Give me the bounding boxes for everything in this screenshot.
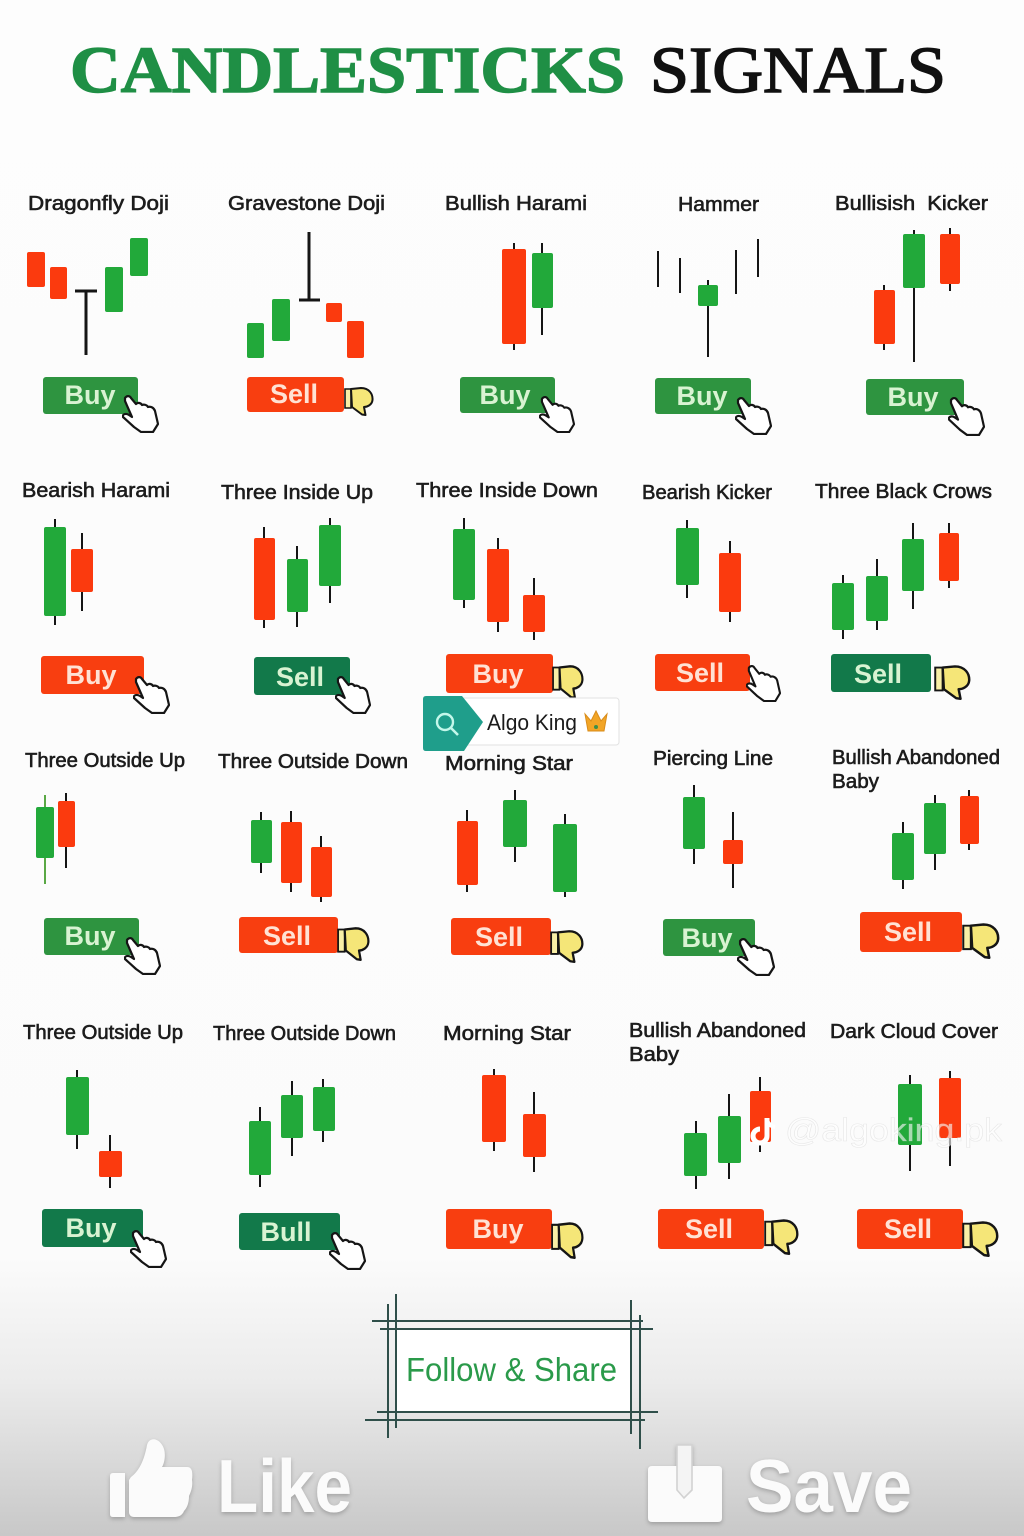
chart (453, 518, 545, 640)
chart (27, 238, 148, 355)
panel: Gravestone Doji (228, 193, 385, 415)
label: Bearish Kicker (642, 482, 772, 504)
button: Buy (42, 1209, 143, 1247)
button: Sell: Sell (884, 917, 932, 947)
icon: hand (131, 1231, 166, 1267)
button: Sell: Sell (475, 922, 523, 952)
watermark: @algoking.pk (785, 1112, 1003, 1148)
button: Buy (41, 656, 144, 694)
panel: Piercing Line (653, 748, 774, 975)
icon: thumbs down (345, 388, 373, 415)
chart (502, 243, 553, 350)
label (629, 1020, 806, 1066)
label: Hammer (678, 194, 759, 216)
chart (874, 228, 960, 362)
icon: hand (330, 1233, 365, 1269)
label: Piercing Line (653, 748, 773, 770)
icon: thumbs down (765, 1220, 797, 1254)
chart (254, 518, 341, 628)
panel: Dragonfly Doji (27, 193, 169, 432)
chart (676, 520, 741, 622)
label: Dragonfly Doji (28, 193, 169, 215)
label: Three Outside Up (25, 750, 185, 772)
panel: Bullish Harami (445, 193, 587, 432)
panel: Dark Cloud Cover (830, 1021, 998, 1256)
icon: thumbs down (963, 924, 998, 958)
chart (251, 811, 332, 902)
panel: Bearish Kicker (642, 482, 780, 701)
button: Sell: Sell (676, 658, 724, 688)
icon: thumbs down (338, 928, 368, 960)
button: Sell (831, 654, 931, 692)
icon: thumbs down (935, 666, 969, 699)
label: Morning Star (445, 753, 573, 775)
button: Buy (866, 379, 964, 415)
icon: hand (123, 396, 158, 432)
chart (892, 790, 979, 889)
panel: Three Outside Up (second) (23, 1022, 183, 1267)
icon: thumbs down (551, 931, 582, 962)
title: SIGNALS (650, 34, 946, 107)
button: Buy: Buy (64, 380, 116, 410)
chart (66, 1070, 122, 1188)
panel: Bullish Abandoned Baby (832, 747, 1000, 958)
label: Baby (629, 1044, 679, 1066)
icon: thumbs up (110, 1439, 192, 1517)
panel: Bullish Abandoned Baby (second) (629, 1020, 806, 1254)
label: Three Outside Down (218, 751, 408, 773)
label: Bullisish Kicker (835, 193, 988, 215)
panel: Three Inside Down (416, 480, 598, 698)
icon: hand (125, 938, 160, 974)
button: Sell: Sell (276, 662, 324, 692)
label: Three Black Crows (815, 481, 992, 503)
label: Morning Star (443, 1023, 571, 1045)
label: Three Outside Up (23, 1022, 183, 1044)
button: Buy: Buy (472, 659, 524, 689)
button: Sell (247, 377, 344, 412)
icon: hand (540, 397, 574, 432)
button: Sell (239, 917, 338, 953)
panel: Bearish Harami (22, 480, 170, 713)
panel: Bullish Kicker (835, 193, 988, 435)
chart (482, 1069, 546, 1172)
panel: Three Outside Down (218, 751, 408, 960)
label: Three Inside Down (416, 480, 598, 502)
button: Buy: Buy (479, 380, 531, 410)
button: Sell: Sell (854, 659, 902, 689)
panel: Morning Star (445, 753, 582, 962)
title (70, 34, 946, 107)
label: Bearish Harami (22, 480, 170, 502)
call to action frame: Follow & Share (365, 1294, 658, 1449)
button: Bull: Bull (260, 1217, 312, 1247)
icon: hand (736, 398, 771, 434)
button: Buy: Buy (887, 382, 939, 412)
button: Buy (446, 1209, 552, 1249)
panel: Morning Star (second) (443, 1023, 582, 1258)
button: Sell (658, 1209, 764, 1249)
icon: thumbs down (963, 1222, 997, 1256)
panel: Three Outside Up (25, 750, 185, 974)
icon: hand (747, 666, 780, 701)
icon: hand (738, 939, 774, 975)
chart (457, 790, 577, 897)
chart (898, 1071, 961, 1171)
panel: Three Inside Up (221, 482, 373, 713)
button: Buy (460, 377, 555, 413)
button: Sell (655, 654, 750, 691)
chart (658, 239, 758, 357)
icon: hand (949, 398, 984, 435)
button: Buy: Buy (472, 1214, 524, 1244)
call to action frame: Follow & Share: Follow & Share (406, 1351, 617, 1388)
button: Buy (663, 919, 755, 956)
button: Buy: Buy (65, 660, 117, 690)
chart (249, 1079, 335, 1187)
button: Bull (239, 1213, 340, 1250)
button: Sell (860, 912, 962, 952)
label: Bullish Abandoned (629, 1020, 806, 1042)
panel: Three Outside Down (second) (213, 1023, 396, 1269)
label (832, 747, 1000, 793)
chart (832, 523, 959, 639)
chart (44, 519, 93, 625)
button: Buy (655, 378, 751, 414)
icon: thumbs down (552, 1224, 582, 1258)
label: Bullish Harami (445, 193, 587, 215)
button: Buy (446, 654, 553, 693)
label: Like: Like (217, 1444, 352, 1528)
button: Buy: Buy (64, 921, 116, 951)
panel: Hammer (655, 194, 771, 434)
panel: Three Black Crows (815, 481, 992, 699)
label: Save: Save (746, 1444, 912, 1528)
label: Three Inside Up (221, 482, 373, 504)
button: Sell: Sell (685, 1214, 733, 1244)
label: Bullish Abandoned (832, 747, 1000, 769)
button: Sell: Sell (270, 379, 318, 409)
icon: hand (336, 677, 370, 713)
icon: thumbs down (553, 666, 582, 698)
button: Buy: Buy (65, 1213, 117, 1243)
label: Dark Cloud Cover (830, 1021, 998, 1043)
search badge: Algo King (423, 696, 619, 751)
button: Sell (451, 918, 551, 955)
icon: save (648, 1445, 722, 1522)
icon: hand (134, 677, 169, 713)
button: Buy: Buy (676, 381, 728, 411)
chart (683, 785, 743, 888)
title: CANDLESTICKS (70, 34, 625, 107)
button: Buy (43, 377, 138, 414)
button: Buy: Buy (681, 923, 733, 953)
label: Three Outside Down (213, 1023, 396, 1045)
button: Sell (857, 1209, 963, 1249)
button: Sell: Sell (884, 1214, 932, 1244)
search badge: Algo King: Algo King (487, 710, 577, 735)
chart (36, 793, 75, 884)
chart (684, 1077, 771, 1189)
label: Gravestone Doji (228, 193, 385, 215)
button: Sell (254, 657, 350, 695)
button: Buy (44, 918, 139, 955)
button: Sell: Sell (263, 921, 311, 951)
chart (247, 232, 364, 358)
label: Baby (832, 771, 879, 793)
